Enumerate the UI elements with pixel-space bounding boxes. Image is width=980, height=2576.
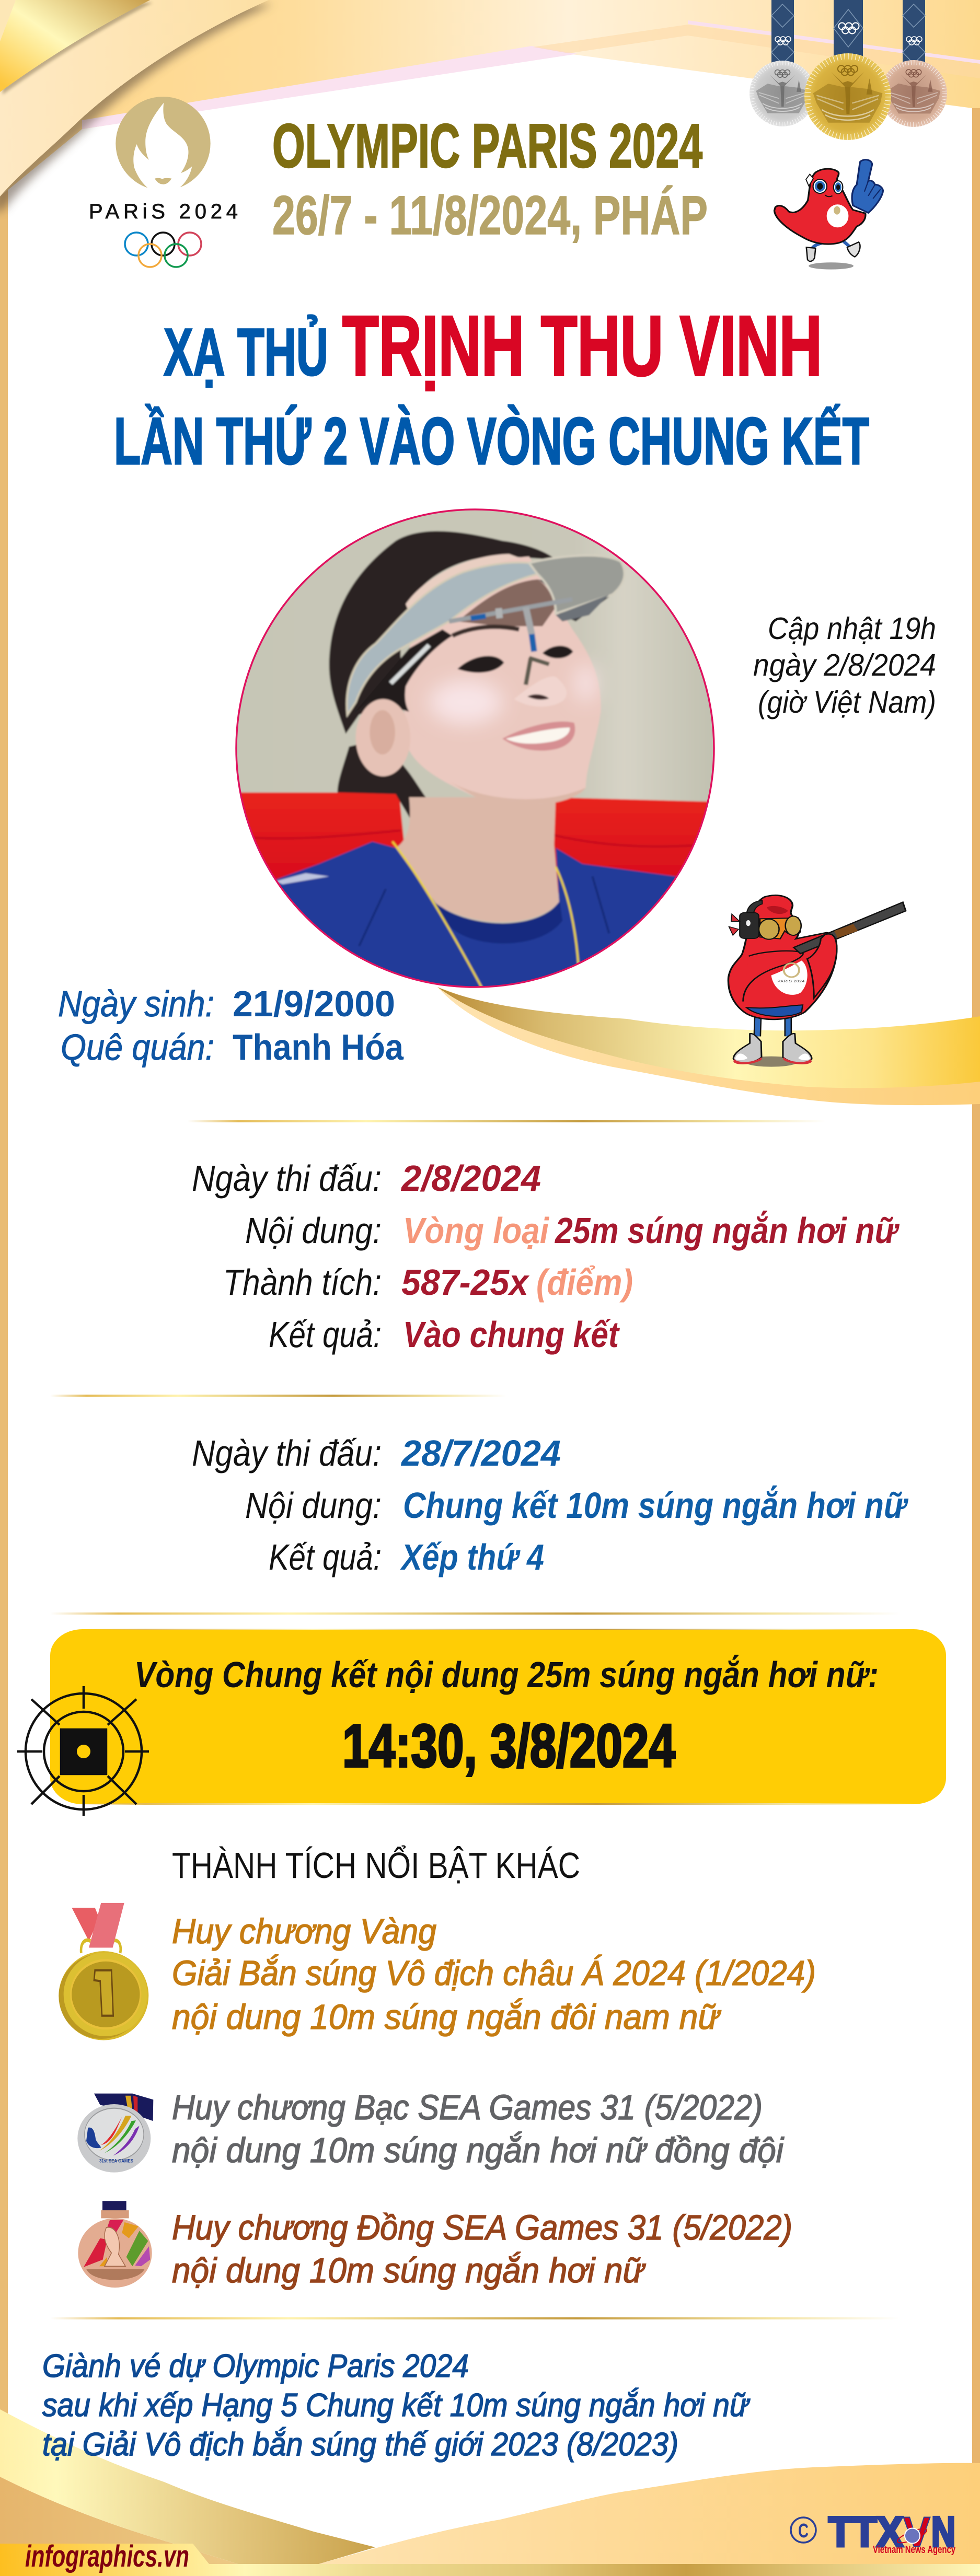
headset	[729, 900, 762, 938]
wall background	[237, 510, 713, 925]
row: date	[192, 1433, 561, 1473]
yellow lanyard	[393, 842, 579, 989]
row: date: 28/7/2024	[400, 1433, 561, 1473]
row: score	[223, 1262, 633, 1303]
arm and gun	[794, 902, 906, 998]
divider	[50, 2317, 900, 2319]
row: event: Nội dung:	[245, 1210, 382, 1251]
mascot: running with foam finger	[775, 160, 883, 270]
medal: bronze	[880, 0, 947, 127]
row: result: Kết quả:	[269, 1537, 382, 1577]
silver achievement text	[172, 2088, 785, 2170]
title: XẠ THỦ: XẠ THỦ	[164, 315, 328, 390]
row: result	[269, 1537, 544, 1577]
mascot foam finger	[852, 160, 883, 213]
home town: Thanh Hóa	[233, 1027, 404, 1067]
row: event	[245, 1210, 900, 1251]
icon: silver medal: 31st SEA GAMES	[99, 2158, 133, 2164]
icon: bronze medal	[78, 2201, 152, 2288]
forehead	[405, 552, 518, 609]
silver achievement text: Huy chương Bạc SEA Games 31 (5/2022)	[172, 2088, 763, 2127]
portrait photo: Trịnh Thu Vinh	[229, 503, 722, 1003]
globe	[896, 2526, 928, 2546]
row: score: 587-25x	[401, 1262, 530, 1303]
qualification note	[42, 2348, 750, 2463]
silver achievement text: nội dung 10m súng ngắn hơi nữ đồng đội	[172, 2131, 785, 2170]
callout time: 14:30, 3/8/2024	[342, 1712, 675, 1780]
final schedule callout	[17, 1629, 946, 1816]
medal: silver	[750, 0, 815, 126]
row: event: Vòng loại	[403, 1210, 549, 1251]
gold swoosh under portrait	[437, 987, 980, 1105]
eyes	[453, 627, 573, 672]
mascot: shooter with shotgun	[728, 895, 906, 1067]
callout heading: Vòng Chung kết nội dung 25m súng ngắn hơi nữ:	[134, 1654, 879, 1695]
header: event name: OLYMPIC PARIS 2024	[272, 111, 702, 181]
hair under visor	[389, 629, 454, 713]
mascot: shooter with shotgun: PARIS 2024	[778, 979, 805, 983]
copyright mark	[791, 2517, 816, 2543]
gold achievement text: nội dung 10m súng ngắn đôi nam nữ	[172, 1998, 721, 2037]
header background shapes	[0, 0, 980, 196]
row: date: Ngày thi đấu:	[192, 1158, 382, 1199]
header: event dates: 26/7 - 11/8/2024, PHÁP	[272, 184, 708, 246]
corner swoosh: cream with shadow	[0, 0, 273, 213]
icon: gold medal	[59, 1903, 148, 2040]
row: result	[269, 1314, 620, 1355]
visor	[347, 555, 625, 715]
shoes	[733, 1034, 812, 1064]
row: result: Xếp thứ 4	[400, 1537, 544, 1577]
athlete profile	[58, 983, 404, 1067]
update note: Cập nhật 19h	[768, 611, 936, 646]
match 2: 28/7/2024	[192, 1433, 908, 1577]
agency letters: TTX	[828, 2509, 903, 2556]
icon: silver medal	[77, 2094, 153, 2173]
gold achievement text	[172, 1912, 816, 2037]
portrait ring	[236, 509, 714, 987]
update note	[753, 611, 936, 720]
sight frame	[391, 599, 572, 685]
logo: TTXVN	[791, 2509, 956, 2556]
update note: (giờ Việt Nam)	[758, 685, 936, 720]
date of birth	[58, 983, 395, 1024]
update note: ngày 2/8/2024	[753, 648, 936, 682]
cheek highlights	[429, 664, 596, 724]
heading: other achievements: THÀNH TÍCH NỔI BẬT KHÁC	[172, 1844, 580, 1886]
belly logo	[771, 960, 808, 995]
ground shadow	[744, 1057, 798, 1067]
smile	[502, 722, 575, 751]
olympic rings	[125, 233, 201, 267]
agency letters	[828, 2509, 955, 2556]
qualification note: Giành vé dự Olympic Paris 2024	[42, 2348, 469, 2384]
row: score: (điểm)	[536, 1262, 633, 1303]
medals: Paris 2024 silver, gold, bronze	[750, 0, 947, 140]
divider	[188, 1120, 825, 1122]
row: event: Nội dung:	[245, 1485, 382, 1526]
website tag	[0, 2539, 209, 2576]
title line 1	[164, 298, 822, 393]
mascot belly logo	[827, 204, 848, 227]
mascot legs and shoes	[806, 239, 860, 270]
date of birth: Ngày sinh:	[58, 983, 214, 1024]
divider	[50, 1612, 900, 1615]
copyright mark: C	[798, 2520, 809, 2542]
logo: Paris 2024	[89, 97, 238, 267]
row: result: Vào chung kết	[403, 1314, 620, 1355]
qualification note: tại Giải Vô địch bắn súng thế giới 2023 (8/2023)	[42, 2427, 678, 2463]
footer background shapes	[0, 2409, 980, 2576]
logo wordmark: PARiS 2024	[89, 200, 238, 223]
row: event: 25m súng ngắn hơi nữ	[554, 1210, 900, 1251]
shirt collar	[436, 902, 562, 944]
row: score: Thành tích:	[223, 1262, 382, 1303]
face	[405, 556, 601, 804]
legs	[757, 1008, 788, 1036]
home town	[61, 1027, 404, 1067]
ponytail	[337, 744, 426, 818]
home town: Quê quán:	[61, 1027, 214, 1067]
mascot eyes	[806, 174, 843, 196]
row: date	[192, 1158, 541, 1199]
red cushion	[241, 791, 707, 893]
gold achievement text: Huy chương Vàng	[172, 1912, 436, 1951]
match 1: 2/8/2024	[192, 1158, 900, 1355]
row: result: Kết quả:	[269, 1314, 382, 1355]
row: event	[245, 1485, 908, 1526]
agency letters: V	[903, 2509, 930, 2556]
callout box	[50, 1629, 946, 1804]
row: date: 2/8/2024	[400, 1158, 541, 1199]
body	[728, 895, 837, 1019]
glasses	[759, 916, 801, 939]
date of birth: 21/9/2000	[233, 983, 395, 1024]
nose	[514, 677, 567, 706]
bronze achievement text: Huy chương Đồng SEA Games 31 (5/2022)	[172, 2208, 792, 2247]
divider	[50, 1395, 506, 1397]
qualification note: sau khi xếp Hạng 5 Chung kết 10m súng ngắn hơi nữ	[42, 2387, 750, 2423]
row: event: Chung kết 10m súng ngắn hơi nữ	[403, 1485, 908, 1526]
website tag: infographics.vn	[25, 2539, 189, 2573]
agency letters: N	[931, 2509, 955, 2556]
medal: gold	[804, 0, 891, 140]
logo flame	[116, 97, 211, 191]
ear	[356, 699, 410, 776]
neck	[396, 797, 559, 922]
hair	[329, 531, 556, 734]
icon: shooting target	[17, 1686, 149, 1816]
bronze achievement text: nội dung 10m súng ngắn hơi nữ	[172, 2251, 646, 2290]
gold achievement text: Giải Bắn súng Vô địch châu Á 2024 (1/2024)	[172, 1954, 816, 1993]
row: date: Ngày thi đấu:	[192, 1433, 382, 1473]
bronze achievement text	[172, 2208, 792, 2290]
blue shirt	[276, 840, 676, 987]
visor shade on forehead	[457, 579, 556, 626]
mascot body	[775, 169, 866, 244]
